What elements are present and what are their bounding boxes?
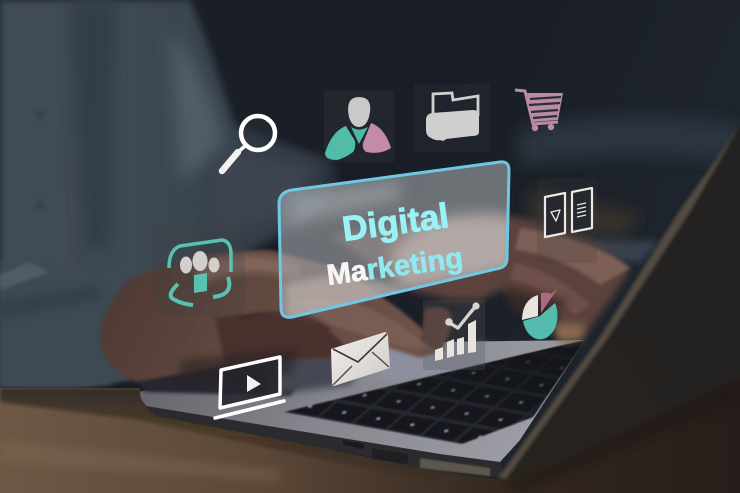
icon: envelope [331,332,390,386]
icon: person with teal and pink shoulders [324,90,394,162]
icon: pie chart [522,288,558,339]
icon: rising bar chart [423,300,485,370]
icon: team of people with circular arrows [153,222,245,316]
photo: laptop lid [498,126,740,480]
heading: Marketing: Marketing [325,242,465,292]
photo: hands on keyboard [100,215,630,382]
photo: wooden table [0,377,740,493]
icon: folder printer [414,84,490,152]
icon: shopping cart [515,90,563,131]
icon: magnifying glass [222,116,275,171]
heading: Digital: Digital [340,196,451,249]
icon: laptop with play button [215,357,284,418]
icon: phone and document tablets [537,178,597,263]
panel: digital marketing glass sign [279,162,520,322]
photo: keyboard [284,340,585,444]
photo: laptop base [135,340,585,478]
photo: shirt and sleeve [0,0,336,392]
